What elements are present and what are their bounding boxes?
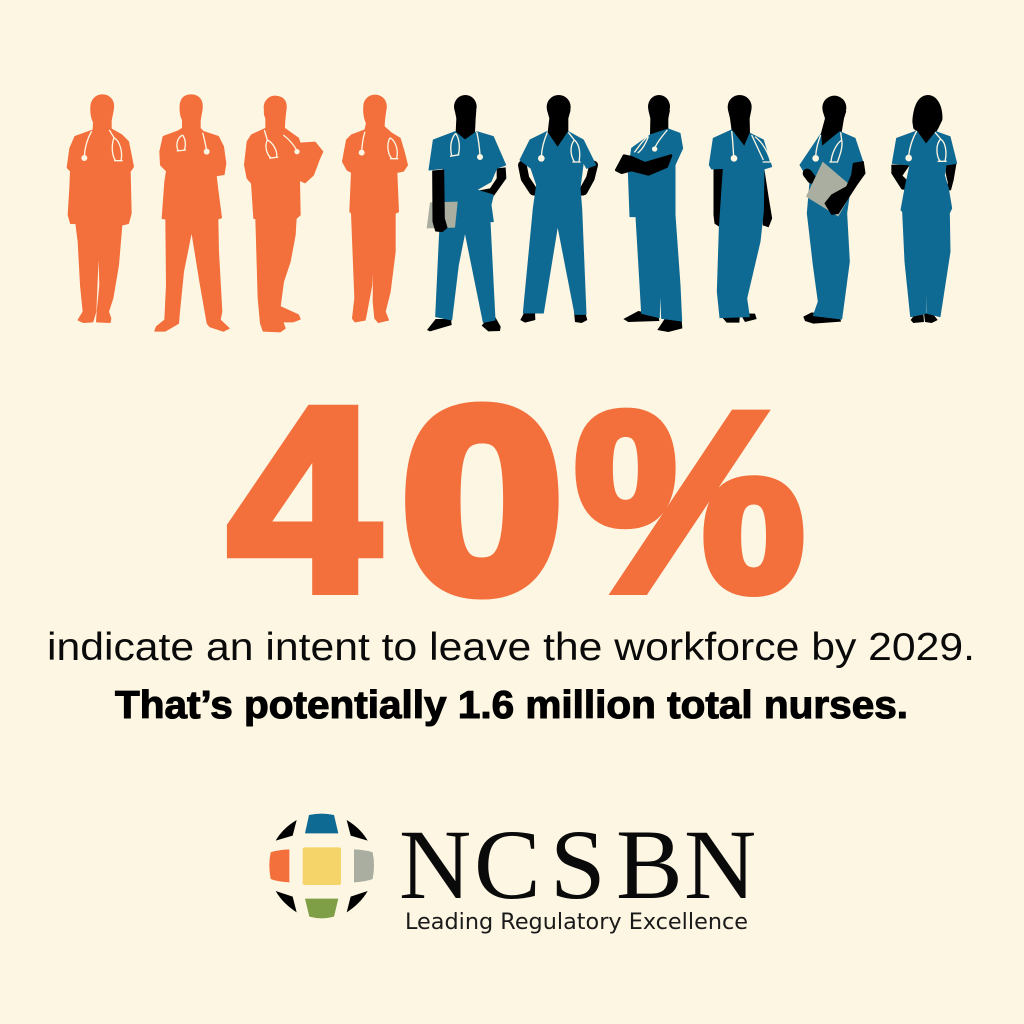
logo: NCSBN emblem (269, 814, 374, 918)
headline statistic: 40%: % (574, 359, 805, 644)
logo wordmark: NCSBN (399, 809, 756, 920)
silhouettes: blue nurses, left group (427, 95, 683, 332)
nurse 10 with long hair (892, 95, 957, 323)
nurse 8 (709, 95, 772, 323)
headline statistic: 40%: 0 (402, 356, 563, 646)
headline statistic: 40%: 4 (228, 353, 381, 646)
nurse 9 holding clipboard (800, 96, 865, 324)
headline statistic: 40% (228, 353, 805, 646)
nurse 7 arms crossed (616, 95, 683, 332)
nurse 4 (343, 95, 407, 322)
bold statement line: That’s potentially 1.6 million total nurses. (115, 684, 908, 727)
nurse 1 (67, 95, 133, 322)
nurse 6 hands on hips (520, 95, 596, 323)
silhouettes: blue nurses, right group (709, 95, 957, 324)
nurse 2 (155, 95, 229, 331)
silhouettes: orange nurses (4 of 10) (67, 95, 407, 332)
nurse 5 with clipboard (427, 95, 506, 331)
statement line: indicate an intent to leave the workforce by 2029. (47, 626, 975, 669)
nurse 3 (245, 96, 323, 332)
logo tagline: Leading Regulatory Excellence (405, 910, 748, 935)
